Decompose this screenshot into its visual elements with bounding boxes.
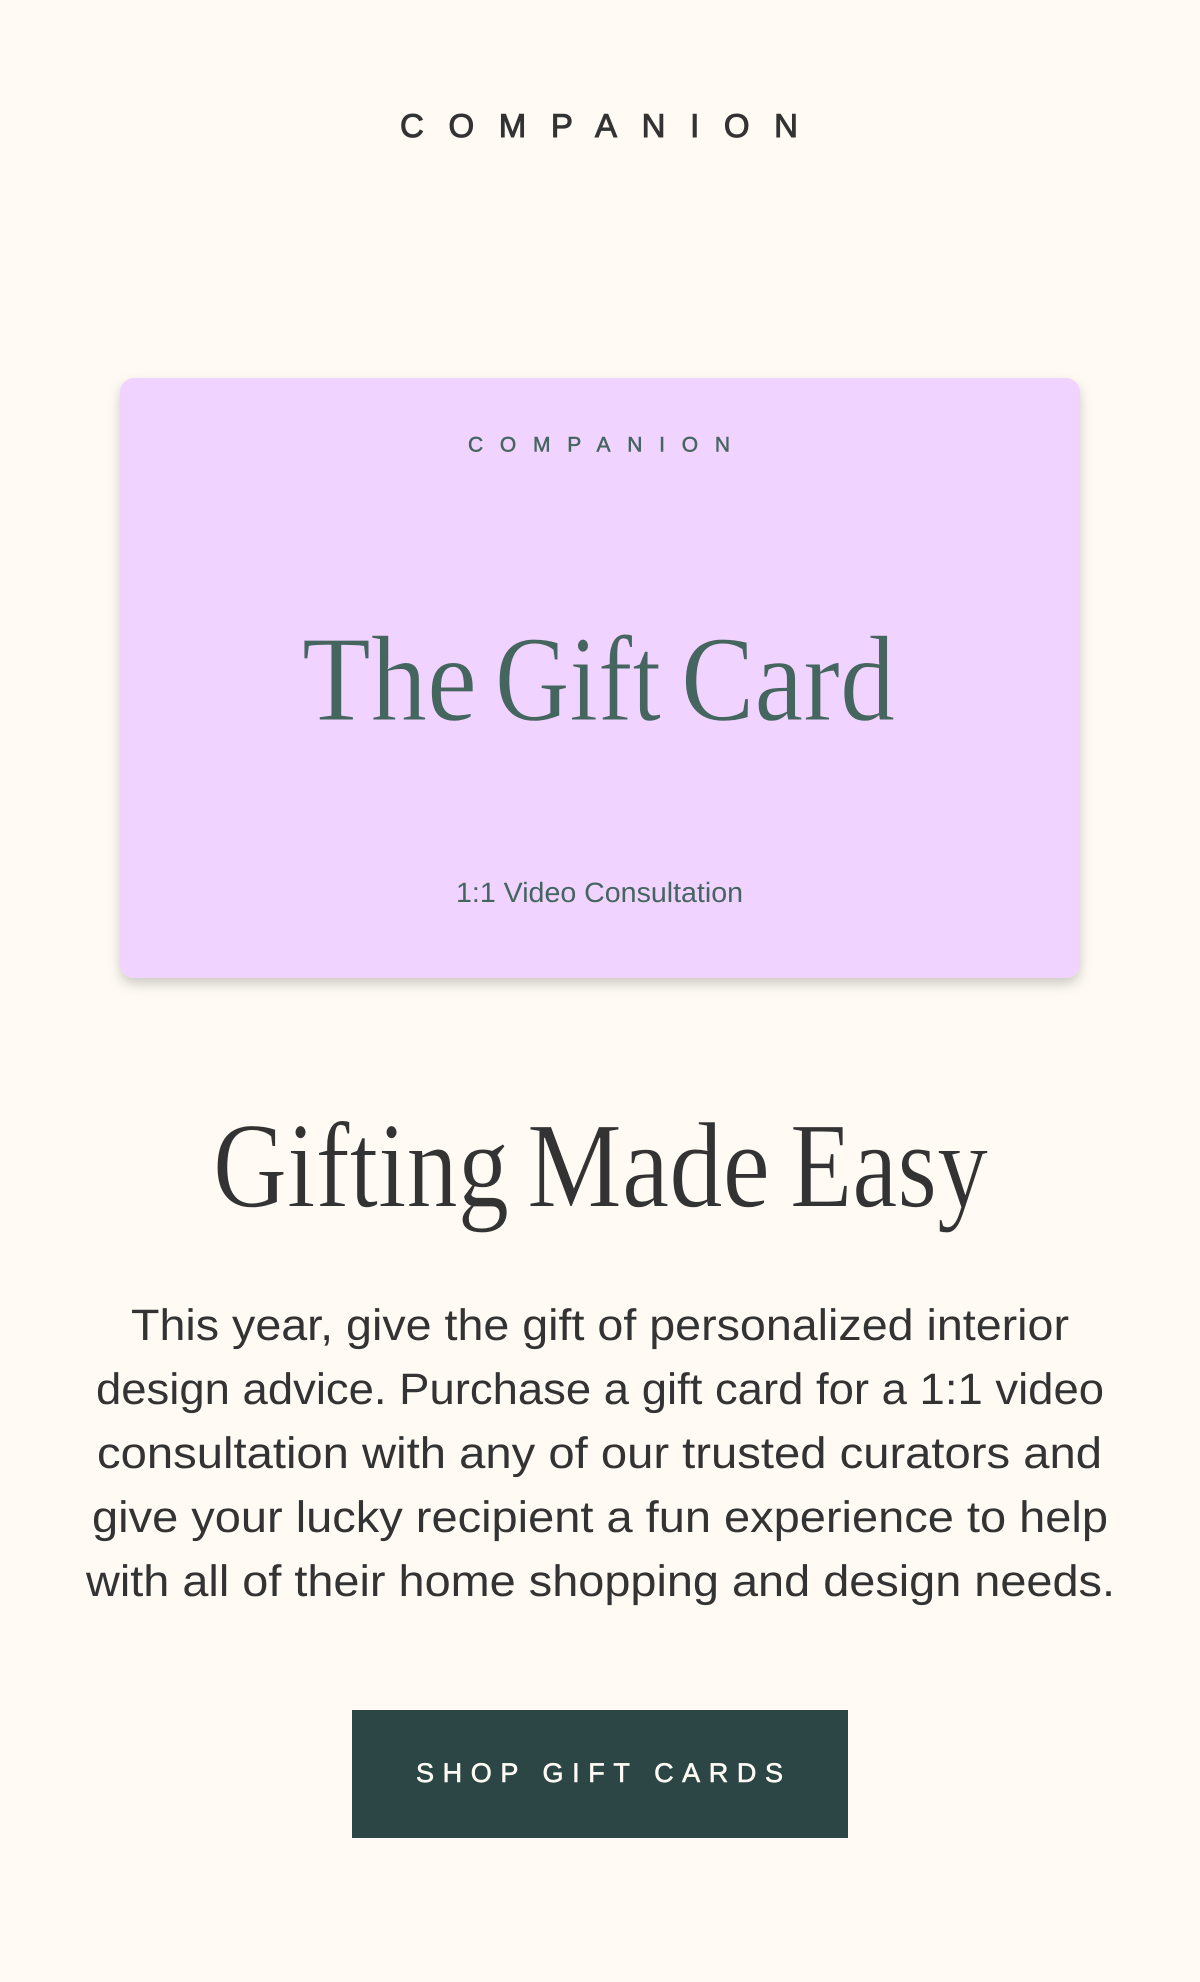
heading: Easy bbox=[790, 1098, 988, 1234]
card title: Card bbox=[681, 612, 895, 747]
body text block: design advice. Purchase a gift card for a 1:1 video bbox=[96, 1365, 1104, 1414]
panel: gift card bbox=[120, 378, 1080, 978]
body text block: This year, give the gift of personalized interior bbox=[131, 1301, 1069, 1350]
body text block: consultation with any of our trusted curators and bbox=[97, 1429, 1102, 1478]
heading: Gifting bbox=[213, 1098, 509, 1234]
card subtitle: 1:1 Video Consultation bbox=[456, 877, 743, 908]
heading bbox=[213, 1098, 988, 1234]
card title: Gift bbox=[495, 612, 661, 747]
card title bbox=[302, 612, 895, 747]
brand logo: COMPANION: COMPANION bbox=[400, 107, 798, 144]
heading: Made bbox=[527, 1098, 770, 1234]
body text block: give your lucky recipient a fun experience to help bbox=[92, 1493, 1108, 1542]
card title: The bbox=[302, 612, 477, 747]
card background bbox=[120, 378, 1080, 978]
button: shop gift cards bbox=[352, 1710, 848, 1838]
card brand label: COMPANION bbox=[468, 434, 730, 456]
body text block bbox=[85, 1301, 1115, 1606]
button: shop gift cards: SHOP GIFT CARDS bbox=[416, 1758, 783, 1788]
body text block: with all of their home shopping and design needs. bbox=[85, 1557, 1115, 1606]
